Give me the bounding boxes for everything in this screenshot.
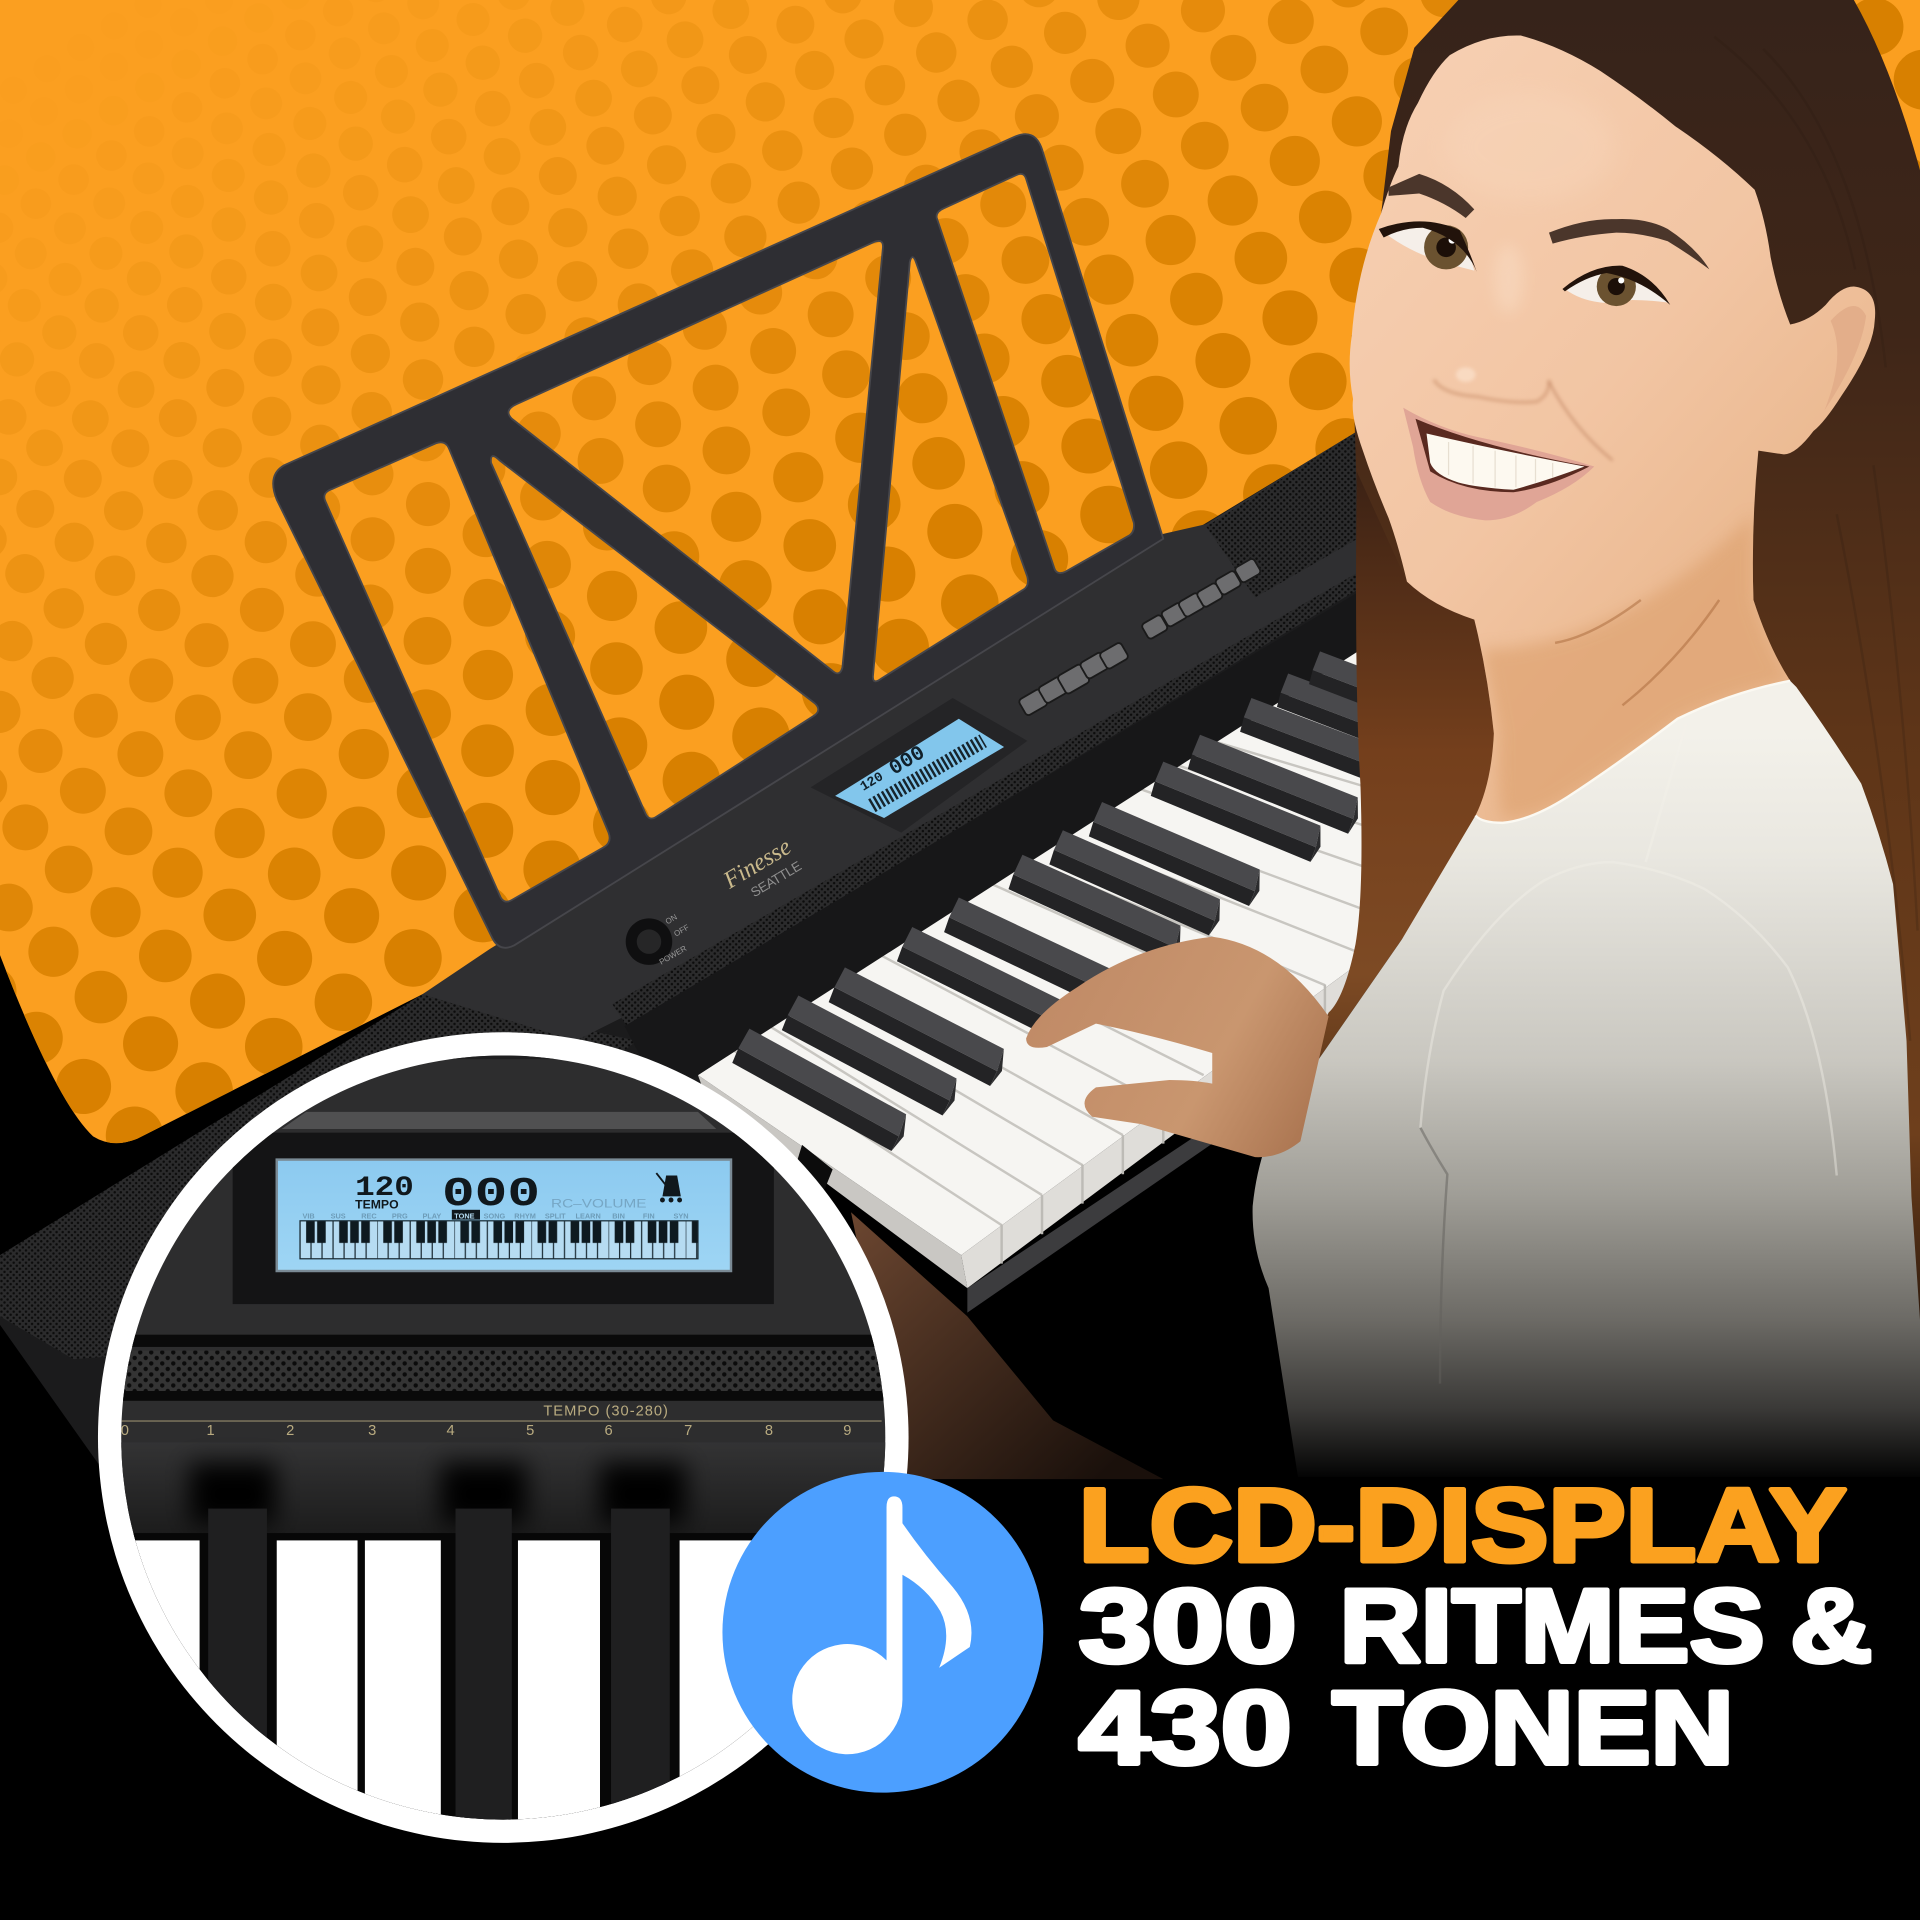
- function labels row: PLAY: [422, 1211, 441, 1220]
- LCD screen: 120: [355, 1173, 414, 1204]
- headline line 2: 300: [1079, 1569, 1297, 1685]
- LCD screen: 000: [442, 1172, 540, 1218]
- icon: music note badge: [722, 1472, 1043, 1793]
- tempo label: [122, 1404, 882, 1435]
- headline line 3: 430: [1079, 1670, 1292, 1786]
- right speaker grille: [1206, 429, 1362, 598]
- function labels row: VIB: [302, 1211, 315, 1220]
- panel controls: [626, 558, 1262, 967]
- tempo label: 9: [843, 1423, 851, 1439]
- function labels row: REC: [361, 1211, 377, 1220]
- tempo label: 3: [368, 1423, 376, 1439]
- power knob: OFF: [672, 923, 691, 938]
- function labels row: PRG: [392, 1211, 408, 1220]
- right eyebrow: [1549, 219, 1709, 269]
- neck shading: [1482, 514, 1790, 818]
- face and neck skin: [1350, 35, 1875, 823]
- white keys in inset: [135, 1540, 753, 1820]
- hand on keys: [1026, 937, 1329, 1157]
- shirt: [1253, 681, 1920, 1477]
- key bed rail: [624, 590, 1362, 1096]
- brand logo: SEATTLE: [748, 858, 804, 900]
- left speaker grille: [0, 994, 637, 1359]
- function labels row: TONE: [454, 1211, 475, 1220]
- headline line 3: TONEN: [1332, 1670, 1734, 1786]
- LCD on keyboard: [811, 698, 1027, 833]
- headline text: [1079, 1468, 1872, 1786]
- headline line 1: LCD-DISPLAY: [1079, 1468, 1847, 1584]
- function labels row: [302, 1210, 689, 1220]
- LCD on keyboard: 000: [886, 742, 930, 781]
- LCD screen: TEMPO: [355, 1198, 399, 1212]
- function buttons left: [1018, 642, 1129, 716]
- LCD screen: RC–VOLUME: [551, 1196, 647, 1210]
- function buttons right: [1141, 558, 1262, 640]
- tempo label: 8: [765, 1423, 773, 1439]
- tempo label: 5: [526, 1423, 534, 1439]
- function labels row: SYN: [673, 1211, 689, 1220]
- ear detail: [1824, 306, 1866, 410]
- forehead highlight: [1445, 92, 1616, 202]
- mouth: [1403, 408, 1594, 520]
- underarm shading: [1420, 1128, 1447, 1384]
- function labels row: LEARN: [576, 1211, 601, 1220]
- function labels row: SPLIT: [545, 1211, 566, 1220]
- right eye: [1562, 266, 1670, 306]
- tempo label: 2: [286, 1423, 294, 1439]
- power knob: ON: [664, 912, 679, 926]
- left eyebrow: [1389, 174, 1474, 218]
- tempo label: 0: [121, 1423, 129, 1439]
- power knob: [626, 912, 691, 967]
- nose: [1434, 245, 1549, 402]
- LCD on keyboard: 120: [858, 770, 887, 795]
- tempo label: 4: [447, 1423, 455, 1439]
- collar edge: [1476, 681, 1790, 823]
- power knob: POWER: [658, 944, 688, 967]
- keyboard body: [0, 429, 1527, 1592]
- LCD bezel: [233, 1133, 774, 1304]
- mini keyboard: [300, 1221, 698, 1259]
- inset circle zoom on LCD: [98, 1032, 909, 1859]
- panel strip and grille: [98, 1335, 909, 1347]
- smile line: [1549, 382, 1613, 460]
- front rail: [967, 1129, 1212, 1313]
- orange halftone background panel: [0, 0, 1920, 1144]
- hair: [1352, 0, 1920, 1329]
- headline line 2: &: [1790, 1569, 1872, 1685]
- tempo label: 6: [604, 1423, 613, 1439]
- white keys: [698, 643, 1527, 1288]
- function labels row: BIN: [612, 1211, 625, 1220]
- function labels row: RHYM: [514, 1211, 536, 1220]
- LCD screen: [277, 1160, 731, 1271]
- black keys: [732, 632, 1475, 1151]
- tempo label: TEMPO (30-280): [543, 1404, 669, 1420]
- headline line 2: RITMES: [1340, 1569, 1764, 1685]
- brand logo: Finesse: [718, 833, 796, 895]
- key rail: [98, 1442, 909, 1543]
- black keys in inset: [208, 1509, 670, 1851]
- function labels row: SUS: [331, 1211, 346, 1220]
- headline line 3: [1079, 1670, 1734, 1786]
- function labels row: FIN: [643, 1211, 655, 1220]
- forearm: [851, 1212, 1163, 1479]
- control panel top: [422, 429, 1362, 1041]
- neck crease: [1555, 600, 1719, 705]
- tempo label: 7: [684, 1423, 692, 1439]
- speaker strip: [612, 573, 1357, 1026]
- dark edge at left end of keys: [793, 1145, 833, 1194]
- woman: [1253, 0, 1920, 1477]
- headline line 2: [1079, 1569, 1872, 1685]
- left hair strand: [1292, 471, 1512, 1096]
- top band of panel: [282, 1112, 716, 1129]
- metronome icon: [656, 1173, 682, 1202]
- left eye: [1379, 221, 1477, 272]
- hair strands: [1714, 37, 1918, 1041]
- function labels row: SONG: [484, 1211, 506, 1220]
- music stand: [273, 134, 1163, 948]
- tempo label: 1: [207, 1423, 215, 1439]
- sleeve seams: [1420, 724, 1837, 1176]
